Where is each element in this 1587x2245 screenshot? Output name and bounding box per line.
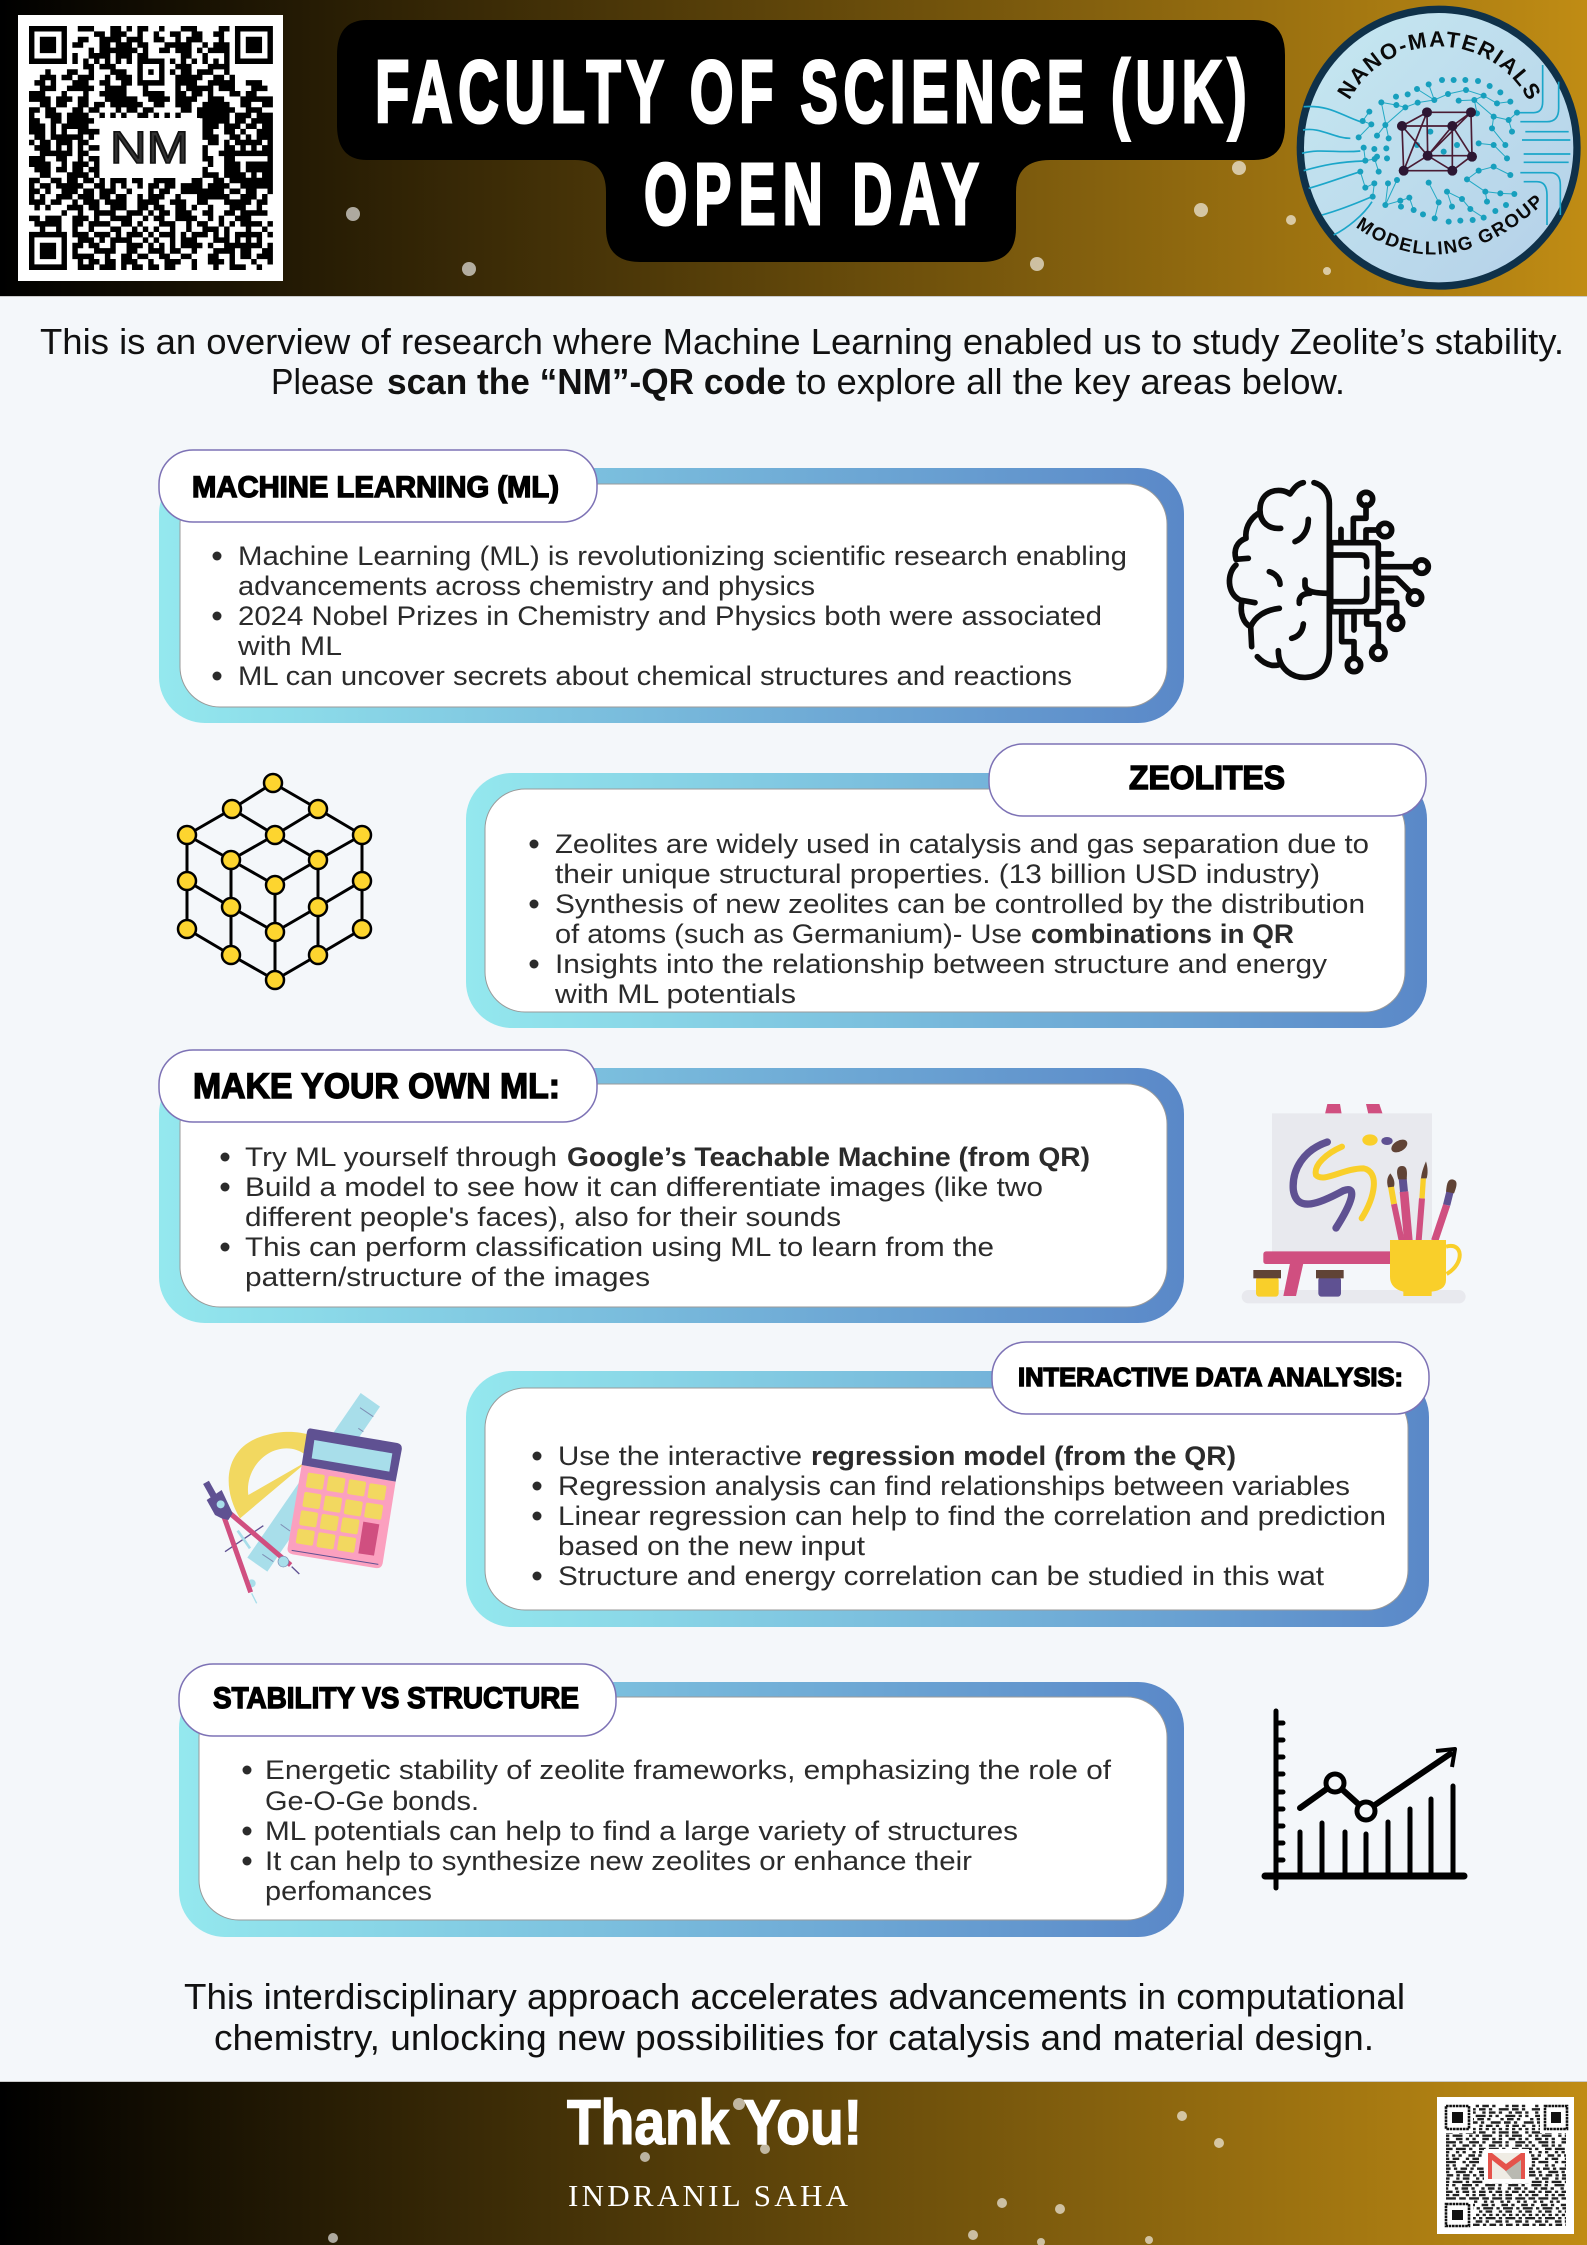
heading: stability vs structure <box>179 1664 616 1736</box>
text: interactive data analysis bullets: Linear regression can help to find the correlation and prediction <box>558 1501 1386 1531</box>
text: interactive data analysis bullets: Structure and energy correlation can be studied in this wat <box>558 1561 1325 1591</box>
text: machine learning bullets: with ML <box>237 631 342 661</box>
text: interactive data analysis bullets: regression model (from the QR) <box>811 1441 1236 1471</box>
text: stability vs structure bullets: Ge-O-Ge bonds. <box>265 1786 479 1816</box>
panel: zeolites <box>466 744 1427 1028</box>
text: make your own ML bullets: This can perform classification using ML to learn from the <box>245 1232 994 1262</box>
text: stability vs structure bullets <box>242 1755 1112 1906</box>
text: zeolites bullets: Synthesis of new zeolites can be controlled by the distribution <box>555 889 1365 919</box>
icon: zeolite lattice <box>178 774 371 989</box>
logo lettering: NANO-MATERIALS <box>1337 31 1540 100</box>
panel: machine learning <box>159 450 1184 723</box>
heading: machine learning <box>159 450 597 522</box>
heading: machine learning: MACHINE LEARNING (ML) <box>192 471 559 504</box>
text: machine learning bullets: 2024 Nobel Prizes in Chemistry and Physics both were associated <box>238 601 1102 631</box>
intro text: to explore all the key areas below. <box>796 361 1345 402</box>
QR code: gmail <box>1437 2097 1574 2234</box>
icon: calculator and geometry tools <box>206 1393 402 1603</box>
thank you heading: Thank You! <box>567 2088 862 2158</box>
logo: Nano-Materials Modelling Group <box>1296 6 1581 290</box>
logo crystal cube <box>1397 107 1477 176</box>
text: make your own ML bullets: different people's faces), also for their sounds <box>245 1202 841 1232</box>
author name: INDRANIL SAHA <box>568 2178 849 2213</box>
text: interactive data analysis bullets: Regression analysis can find relationships between variables <box>558 1471 1350 1501</box>
text: stability vs structure bullets: perfomances <box>265 1876 432 1906</box>
logo neural network <box>1356 77 1520 225</box>
text: make your own ML bullets: Build a model to see how it can differentiate images (like two <box>245 1172 1043 1202</box>
heading: interactive data analysis: INTERACTIVE DATA ANALYSIS: <box>1018 1362 1403 1392</box>
heading: zeolites <box>989 744 1426 816</box>
closing text: chemistry, unlocking new possibilities for catalysis and material design. <box>214 2017 1374 2058</box>
text: interactive data analysis bullets <box>532 1441 1386 1591</box>
logo lettering: MODELLING GROUP <box>1356 196 1539 254</box>
text: zeolites bullets <box>530 829 1369 1009</box>
heading: make your own ML: MAKE YOUR OWN ML: <box>193 1067 560 1106</box>
title: Faculty of Science (UK) Open Day <box>337 20 1285 262</box>
heading: stability vs structure: STABILITY VS STRUCTURE <box>213 1682 579 1715</box>
logo circuit traces <box>1302 65 1570 235</box>
QR code: NM <box>18 15 283 281</box>
text: interactive data analysis bullets: based on the new input <box>558 1531 866 1561</box>
icon: brain and chip <box>1229 483 1428 677</box>
title: Faculty of Science (UK) Open Day: FACULTY OF SCIENCE (UK) <box>375 42 1247 141</box>
heading: make your own ML <box>159 1050 597 1122</box>
text: make your own ML bullets: Google’s Teachable Machine (from QR) <box>567 1142 1090 1172</box>
logo lettering <box>1337 31 1540 254</box>
text: machine learning bullets <box>212 541 1127 691</box>
closing text: This interdisciplinary approach accelerates advancements in computational <box>184 1976 1405 2017</box>
panel: stability vs structure <box>179 1664 1184 1937</box>
heading: interactive data analysis <box>992 1342 1429 1414</box>
text: machine learning bullets: Machine Learning (ML) is revolutionizing scientific research enabling <box>238 541 1127 571</box>
text: zeolites bullets: with ML potentials <box>554 979 796 1009</box>
text: machine learning bullets: ML can uncover secrets about chemical structures and reactions <box>238 661 1072 691</box>
text: zeolites bullets: their unique structural properties. (13 billion USD industry) <box>555 859 1320 889</box>
intro text: This is an overview of research where Machine Learning enabled us to study Zeolite’s stability. <box>40 321 1564 362</box>
text: zeolites bullets: combinations in QR <box>1031 919 1294 949</box>
text: stability vs structure bullets: It can help to synthesize new zeolites or enhance their <box>265 1846 972 1876</box>
icon: easel and paint brushes <box>1242 1104 1466 1303</box>
text: zeolites bullets: Insights into the relationship between structure and energy <box>555 949 1328 979</box>
text: zeolites bullets: of atoms (such as Germanium)- Use <box>555 919 1022 949</box>
text: make your own ML bullets: Try ML yourself through <box>245 1142 557 1172</box>
title: Faculty of Science (UK) Open Day: OPEN DAY <box>644 147 979 243</box>
text: machine learning bullets: advancements across chemistry and physics <box>238 571 815 601</box>
text: interactive data analysis bullets: Use the interactive <box>558 1441 802 1471</box>
text: stability vs structure bullets: ML potentials can help to find a large variety of structures <box>265 1816 1018 1846</box>
text: stability vs structure bullets: Energetic stability of zeolite frameworks, emphasizing the role of <box>265 1755 1112 1785</box>
text: zeolites bullets: Zeolites are widely used in catalysis and gas separation due to <box>555 829 1369 859</box>
intro text <box>40 321 1564 402</box>
QR code: NM: NM <box>110 122 189 173</box>
heading: zeolites: ZEOLITES <box>1129 759 1285 796</box>
header banner <box>0 0 1587 297</box>
closing text <box>184 1976 1405 2058</box>
text: make your own ML bullets <box>220 1142 1090 1292</box>
panel: make your own ML <box>159 1050 1184 1323</box>
intro text: scan the “NM”-QR code <box>387 361 786 402</box>
intro text: Please <box>271 361 374 402</box>
panel: interactive data analysis <box>466 1342 1429 1627</box>
icon: line and bar chart <box>1265 1711 1464 1888</box>
footer banner <box>0 2081 1587 2245</box>
text: make your own ML bullets: pattern/structure of the images <box>245 1262 650 1292</box>
